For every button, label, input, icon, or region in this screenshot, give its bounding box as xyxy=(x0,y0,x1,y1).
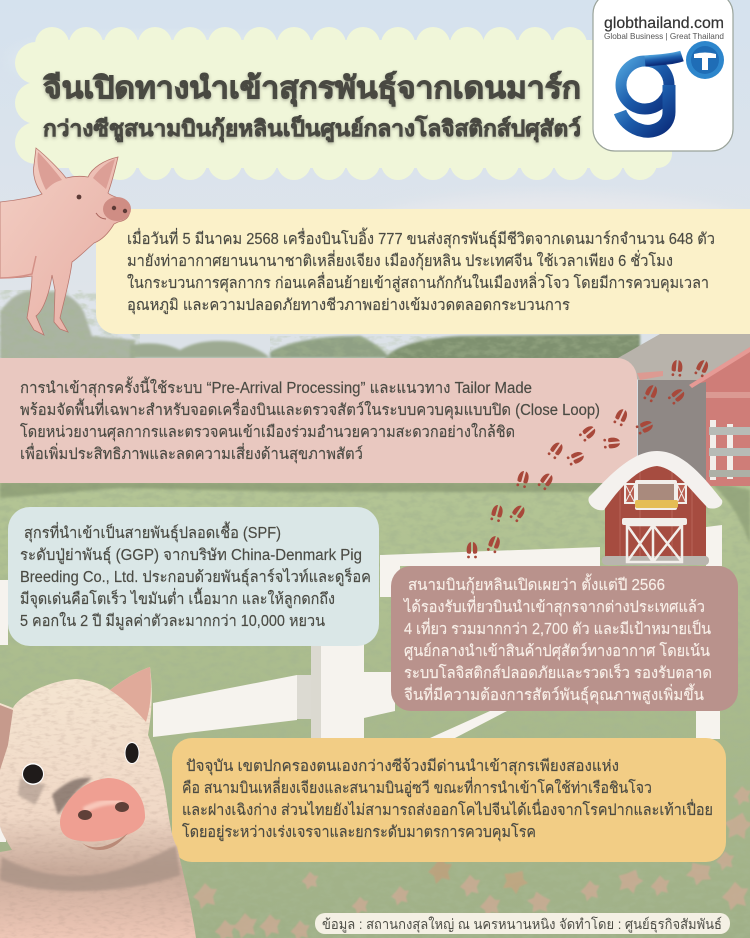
panel: flight arrival: มายังท่าอากาศยานนานาชาติเหลี่ยงเจียง เมืองกุ้ยหลิน ประเทศจีน ใช้เวลาเพียง 6 ชั่วโมง xyxy=(127,250,673,271)
subtitle: กว่างซีชูสนามบินกุ้ยหลินเป็นศูนย์กลางโลจิสติกส์ปศุสัตว์ xyxy=(43,114,581,143)
panel: flight arrival: เมื่อวันที่ 5 มีนาคม 2568 เครื่องบินโบอิ้ง 777 ขนส่งสุกรพันธุ์มีชีวิตจากเดนมาร์กจำนวน 648 ตัว xyxy=(127,227,715,249)
panel: pre-arrival processing: เพื่อเพิ่มประสิทธิภาพและลดความเสี่ยงด้านสุขภาพสัตว์ xyxy=(20,443,363,464)
piglet ear xyxy=(110,667,151,722)
panel: SPF breed: ระดับปู่ย่าพันธุ์ (GGP) จากบริษัท China-Denmark Pig xyxy=(20,546,362,565)
panel: pre-arrival processing xyxy=(0,358,637,483)
title: จีนเปิดทางนำเข้าสุกรพันธุ์จากเดนมาร์ก xyxy=(43,71,581,107)
panel: import ports: ปัจจุบัน เขตปกครองตนเองกว่างซีจ้วงมีด่านนำเข้าสุกรเพียงสองแห่ง xyxy=(186,758,619,776)
panel: Guilin airport: ระบบโลจิสติกส์ปลอดภัยและรวดเร็ว รองรับตลาด xyxy=(404,663,712,682)
panel: import ports xyxy=(172,738,726,862)
panel: SPF breed: มีจุดเด่นคือโตเร็ว ไขมันต่ำ เนื้อมาก และให้ลูกดกถึง xyxy=(20,587,335,609)
panel: pre-arrival processing: การนำเข้าสุกรครั้งนี้ใช้ระบบ “Pre-Arrival Processing” และแนวทาง Tailor Made xyxy=(20,376,532,398)
source credit pill: ข้อมูล : สถานกงสุลใหญ่ ณ นครหนานหนิง จัดทำโดย : ศูนย์ธุรกิจสัมพันธ์ xyxy=(322,916,722,933)
panel: import ports: คือ สนามบินเหลี่ยงเจียงและสนามบินอู่ซวี ขณะที่การนำเข้าโคใช้ท่าเรือชินโจว xyxy=(182,777,652,798)
panel: Guilin airport: ได้รองรับเที่ยวบินนำเข้าสุกรจากต่างประเทศแล้ว xyxy=(402,596,705,617)
panel: pre-arrival processing: พร้อมจัดพื้นที่เฉพาะสำหรับจอดเครื่องบินและตรวจสัตว์ในระบบควบคุมแบบปิด (Close Loop) xyxy=(20,398,600,420)
panel: flight arrival: ในกระบวนการศุลกากร ก่อนเคลื่อนย้ายเข้าสู่สถานกักกันในเมืองหลิ่วโจว โดยมีการควบคุมเวลา xyxy=(127,272,709,293)
pig ears and snout shading xyxy=(37,152,131,221)
illustration: piglet portrait xyxy=(0,667,196,938)
panel: Guilin airport: สนามบินกุ้ยหลินเปิดเผยว่า ตั้งแต่ปี 2566 xyxy=(408,573,665,595)
logo wordmark: globthailand.com xyxy=(604,15,724,32)
panel: import ports: โดยอยู่ระหว่างเร่งเจรจาและยกระดับมาตรการควบคุมโรค xyxy=(182,823,536,842)
panel: Guilin airport: 4 เที่ยว รวมมากกว่า 2,700 ตัว และมีเป้าหมายเป็น xyxy=(404,618,711,638)
panel: SPF breed: Breeding Co., Ltd. ประกอบด้วยพันธุ์ลาร์จไวท์และดูร็อค xyxy=(20,567,371,587)
panel: Guilin airport: ศูนย์กลางนำเข้าสินค้าปศุสัตว์ทางอากาศ โดยเน้น xyxy=(404,642,710,661)
panel: flight arrival: อุณหภูมิ และความปลอดภัยทางชีวภาพอย่างเข้มงวดตลอดกระบวนการ xyxy=(127,297,570,315)
panel: Guilin airport xyxy=(391,566,738,711)
logo g mark xyxy=(620,56,682,131)
piglet snout xyxy=(60,778,145,842)
fallen leaves xyxy=(193,786,750,938)
piglet eyes xyxy=(22,742,140,785)
background barn xyxy=(618,334,750,486)
panel: Guilin airport: จีนที่มีความต้องการสัตว์พันธุ์คุณภาพสูงเพิ่มขึ้น xyxy=(404,683,704,705)
illustration: standing pig xyxy=(0,148,131,335)
barn door xyxy=(622,518,687,562)
hoof prints trail xyxy=(467,358,710,558)
panel: SPF breed: 5 คอกใน 2 ปี มีมูลค่าตัวละมากกว่า 10,000 หยวน xyxy=(20,612,325,631)
panel: import ports: และฝางเฉิงก่าง ส่วนไทยยังไม่สามารถส่งออกโคไปจีนได้เนื่องจากโรคปากและเท้าเปื่อย xyxy=(182,799,713,819)
logo T badge xyxy=(686,41,724,79)
title scalloped panel xyxy=(15,27,672,180)
logo tagline: Global Business | Great Thailand xyxy=(604,31,724,41)
barn window xyxy=(625,480,686,510)
panel: SPF breed xyxy=(8,507,379,646)
panel: SPF breed: สุกรที่นำเข้าเป็นสายพันธุ์ปลอดเชื้อ (SPF) xyxy=(24,521,281,543)
white fence xyxy=(0,525,722,842)
logo card xyxy=(593,0,733,151)
panel: flight arrival xyxy=(96,209,750,334)
piglet collar shading xyxy=(0,846,180,891)
illustration: red barn with snowy roof xyxy=(588,451,722,565)
barn snowy roof xyxy=(588,451,722,510)
panel: pre-arrival processing: โดยหน่วยงานศุลกากรและตรวจคนเข้าเมืองร่วมอำนวยความสะดวกอย่างใกล้ชิด xyxy=(20,423,515,442)
